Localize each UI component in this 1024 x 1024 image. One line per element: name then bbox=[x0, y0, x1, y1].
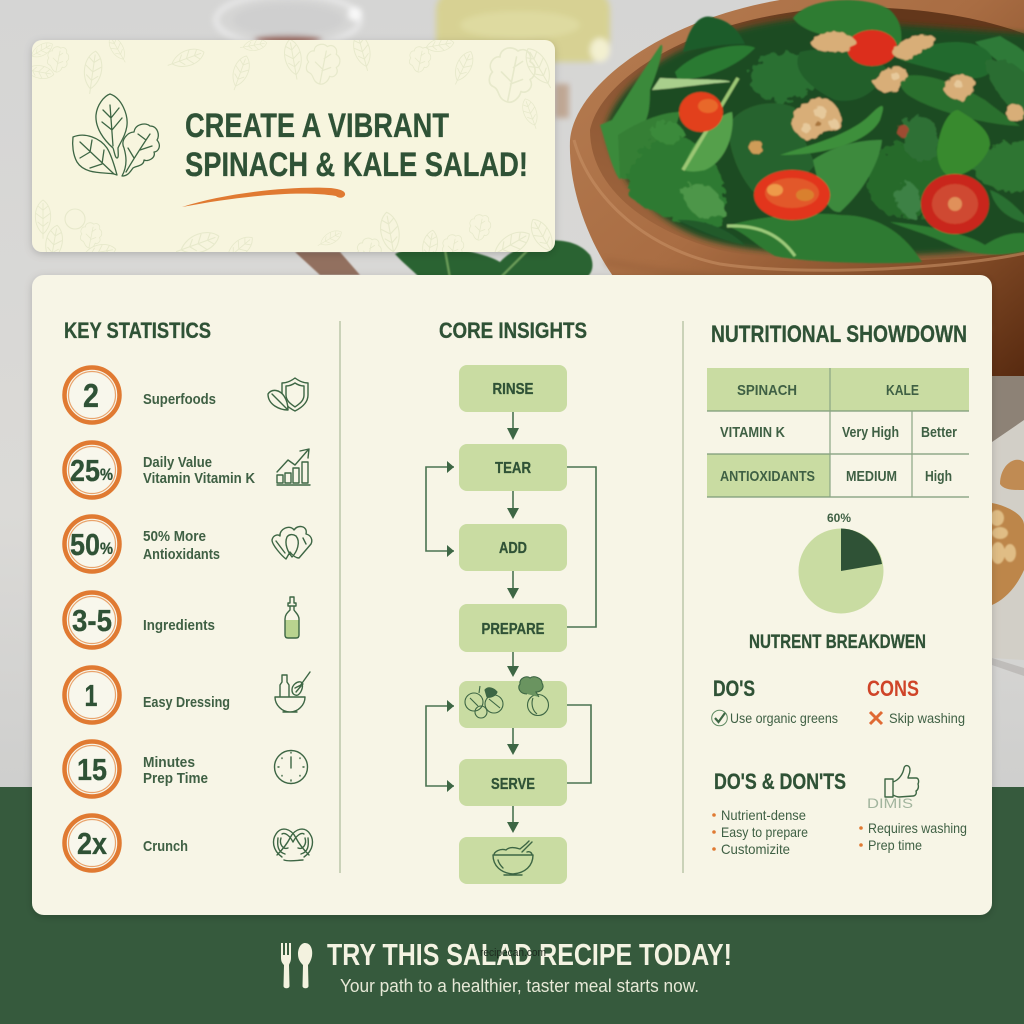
stat: 25% daily value: Vitamin Vitamin K bbox=[143, 470, 255, 487]
footer heading: TRY THIS SALAD RECIPE TODAY! bbox=[327, 937, 732, 972]
do's and don'ts list: Requires washing bbox=[868, 820, 967, 836]
footer band bbox=[0, 787, 1024, 1024]
stat: 15 minutes prep time: Prep Time bbox=[143, 770, 208, 787]
do's and don'ts list: DO'S & DON'TS bbox=[714, 769, 846, 794]
do's and don'ts list: Customizite bbox=[721, 841, 790, 857]
wood board and blurred spinach under banner bbox=[295, 252, 360, 275]
step: salad bowl icon box bbox=[459, 837, 567, 884]
pie chart: nutrient breakdown: NUTRENT BREAKDWEN bbox=[749, 632, 926, 653]
pie chart: nutrient breakdown: 60% bbox=[827, 511, 851, 525]
comparison table: MEDIUM bbox=[846, 468, 897, 485]
top and back spinach leaves bbox=[793, 0, 902, 46]
panel: key statistics bbox=[64, 318, 312, 870]
comparison table: High bbox=[925, 468, 952, 485]
comparison table bbox=[707, 368, 969, 497]
stat: 2 superfoods: 2 bbox=[83, 377, 99, 414]
do's: DO'S bbox=[713, 676, 755, 701]
stat: 1 easy dressing: 1 bbox=[84, 678, 98, 713]
step: rinse: RINSE bbox=[492, 381, 534, 398]
panel: core insights flow bbox=[426, 318, 596, 884]
step: add bbox=[459, 524, 567, 571]
step: prepare: PREPARE bbox=[482, 621, 545, 638]
step: tear: TEAR bbox=[495, 460, 531, 477]
stat: 50% more antioxidants: 50 bbox=[70, 527, 100, 562]
stat: 15 minutes prep time bbox=[64, 742, 308, 796]
do's and don'ts list: Nutrient-dense bbox=[721, 807, 806, 823]
cons: CONS bbox=[867, 676, 919, 701]
heading: core insights: CORE INSIGHTS bbox=[439, 318, 587, 343]
stat: 50% more antioxidants bbox=[64, 516, 312, 572]
walnuts bbox=[749, 32, 1024, 154]
stat: 25% daily value: Daily Value bbox=[143, 454, 212, 471]
step: serve: SERVE bbox=[491, 776, 535, 793]
step: rinse bbox=[459, 365, 567, 412]
step: add: ADD bbox=[499, 540, 527, 557]
banner doodles: leaves and kale bbox=[32, 40, 553, 252]
stat: 50% more antioxidants: % bbox=[100, 539, 113, 558]
comparison table: ANTIOXIDANTS bbox=[720, 468, 815, 485]
stat: 50% more antioxidants: 50% More bbox=[143, 528, 206, 545]
comparison table: VITAMIN K bbox=[720, 424, 785, 441]
stat: 2x crunch: 2x bbox=[77, 826, 108, 861]
cons bbox=[867, 676, 965, 726]
cons: Skip washing bbox=[889, 710, 965, 726]
cloth and walnut bowl at right edge bbox=[990, 376, 1024, 676]
stat: 1 easy dressing bbox=[64, 668, 310, 722]
stat: 2x crunch: Crunch bbox=[143, 838, 188, 855]
footer call to action bbox=[281, 937, 732, 996]
stat: 50% more antioxidants: Antioxidants bbox=[143, 546, 220, 563]
wooden bowl bbox=[570, 0, 1024, 378]
kale masses bbox=[628, 53, 1024, 225]
title banner bbox=[22, 32, 560, 267]
title text bbox=[185, 107, 528, 184]
stat: 2 superfoods bbox=[64, 368, 308, 422]
stat: 25% daily value: % bbox=[100, 465, 113, 484]
stat: 3-5 ingredients bbox=[64, 592, 299, 648]
heading: nutritional showdown: NUTRITIONAL SHOWDOWN bbox=[711, 321, 967, 348]
do's: Use organic greens bbox=[730, 710, 838, 726]
stat: 15 minutes prep time: Minutes bbox=[143, 754, 195, 771]
step: prepare bbox=[459, 604, 567, 652]
heading: key statistics: KEY STATISTICS bbox=[64, 318, 211, 343]
comparison table: SPINACH bbox=[737, 382, 797, 399]
do's bbox=[712, 676, 838, 726]
icon: thumbs up with faded label: DIMIS bbox=[867, 795, 913, 811]
do's and don'ts list bbox=[712, 769, 967, 857]
stat: 25% daily value: 25 bbox=[70, 453, 100, 488]
oil glass, blurred bbox=[436, 0, 610, 62]
step: serve bbox=[459, 759, 567, 806]
watermark: recipecan.com bbox=[480, 947, 546, 959]
footer subheading: Your path to a healthier, taster meal starts now. bbox=[340, 976, 699, 996]
icon: spinach and kale leaves bbox=[73, 94, 159, 176]
tomatoes bbox=[679, 30, 989, 234]
stat: 25% daily value bbox=[64, 442, 310, 498]
do's and don'ts list: Easy to prepare bbox=[721, 824, 808, 840]
glass dish, blurred bbox=[216, 0, 362, 46]
front spinach leaves bbox=[797, 49, 887, 101]
main panel bbox=[32, 275, 992, 915]
title text: SPINACH & KALE SALAD! bbox=[185, 146, 528, 184]
title text: CREATE A VIBRANT bbox=[185, 107, 449, 145]
stat: 1 easy dressing: Easy Dressing bbox=[143, 694, 230, 711]
icon: thumbs up with faded label bbox=[867, 766, 919, 811]
step: tear bbox=[459, 444, 567, 491]
comparison table: KALE bbox=[886, 382, 919, 399]
stat: 2 superfoods: Superfoods bbox=[143, 391, 216, 408]
salad bbox=[600, 0, 1024, 263]
comparison table: Very High bbox=[842, 424, 899, 441]
flow down arrows bbox=[507, 412, 519, 833]
stat: 3-5 ingredients: 3-5 bbox=[72, 603, 112, 638]
panel: nutritional showdown bbox=[707, 321, 969, 857]
icon: fork and spoon bbox=[281, 943, 312, 988]
stat: 2x crunch bbox=[64, 816, 312, 870]
do's and don'ts list: Prep time bbox=[868, 837, 922, 853]
pie chart: nutrient breakdown bbox=[749, 511, 926, 653]
step: vegetables icon box bbox=[459, 677, 567, 728]
stat: 15 minutes prep time: 15 bbox=[77, 752, 107, 787]
stat: 3-5 ingredients: Ingredients bbox=[143, 617, 215, 634]
orange brush underline bbox=[182, 188, 345, 207]
flow loop arrows bbox=[426, 461, 596, 792]
comparison table: Better bbox=[921, 424, 957, 441]
